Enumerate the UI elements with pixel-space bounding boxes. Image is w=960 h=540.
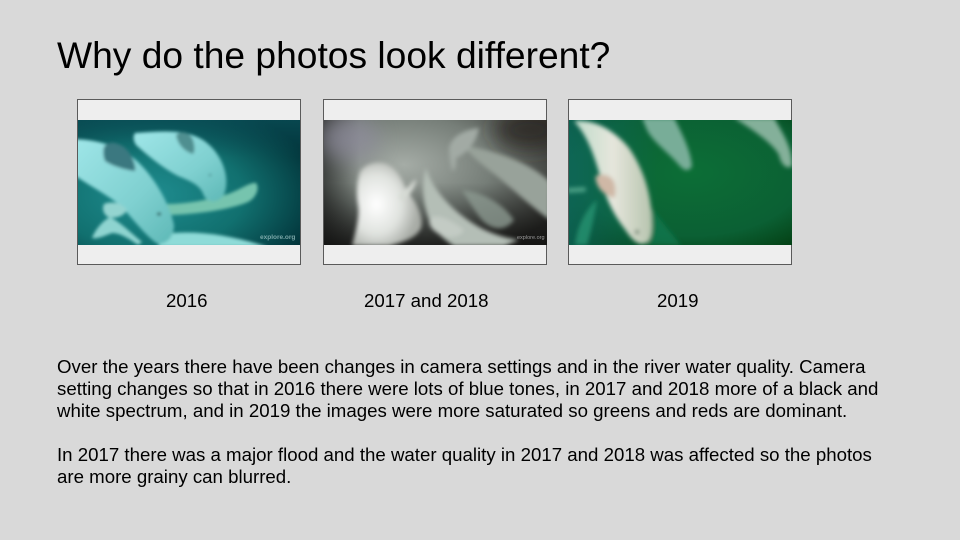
label: 2016: 2016 [166,290,208,311]
label: 2017 and 2018: 2017 and 2018 [364,290,488,311]
text block: camera setting explanation: setting changes so that in 2016 there were lots of blue tones, in 2017 and 2018 more of a black and [57,378,878,399]
text block: camera setting explanation: Over the years there have been changes in camera settings and in the river water quality. Camera [57,356,866,377]
text block: camera setting explanation: white spectrum, and in 2019 the images were more saturated so greens and reds are dominant. [57,400,847,421]
watermark: explore.org [260,234,295,241]
label: 2019: 2019 [657,290,699,311]
text block: flood and water quality explanation: are more grainy can blurred. [57,466,291,487]
text block: flood and water quality explanation: In 2017 there was a major flood and the water quality in 2017 and 2018 was affected so the photos [57,444,872,465]
title: Why do the photos look different? [57,34,610,76]
text block: camera setting explanation [57,356,878,421]
photo: 2019 beluga whales in saturated green water [568,99,792,265]
photo: 2017 and 2018 beluga whales in black and white [323,99,547,265]
photo: 2016 beluga whales in blue-teal water [77,99,301,265]
watermark: explore.org [517,235,545,241]
text block: flood and water quality explanation [57,444,872,487]
